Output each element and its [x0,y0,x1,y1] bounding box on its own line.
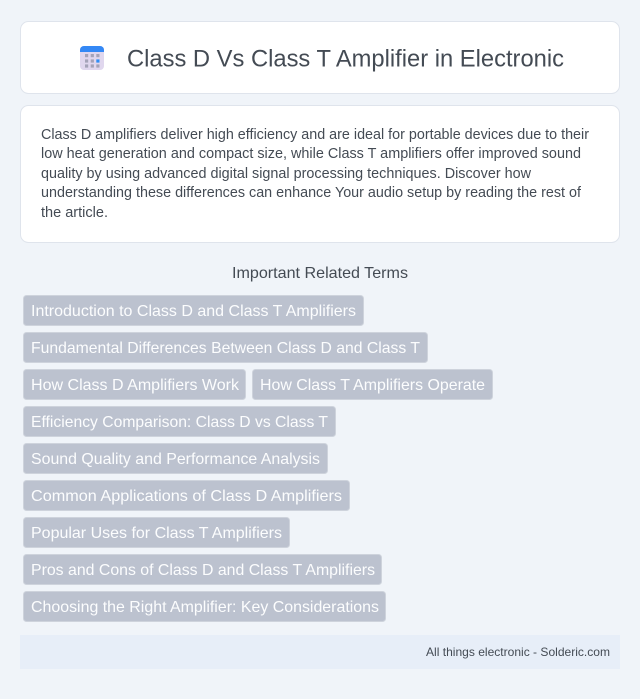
tag: how class d works: How Class D Amplifiers Work [31,377,239,394]
tag: how class t operates [252,370,492,400]
footer: All things electronic - Solderic.com [426,645,610,659]
panel: summary paragraph [20,106,620,242]
tag: class t uses: Popular Uses for Class T Amplifiers [31,525,282,542]
icon: calendar grid [80,46,104,70]
tag: fundamental differences: Fundamental Differences Between Class D and Class T [31,340,420,357]
tag: sound quality [24,444,328,474]
tag: choosing the right amplifier [24,592,386,622]
tag: pros and cons: Pros and Cons of Class D and Class T Amplifiers [31,562,375,579]
tag: fundamental differences [24,332,428,362]
tag: introduction [24,296,364,326]
tag: choosing the right amplifier: Choosing the Right Amplifier: Key Considerations [31,599,379,616]
header panel [20,22,620,94]
tag: efficiency comparison [24,406,336,436]
panel: summary paragraph: quality by using advanced digital signal processing techniques. Discover how [41,166,532,182]
panel: summary paragraph: the article. [41,205,108,221]
heading: important related terms: Important Related Terms [232,265,408,282]
panel: summary paragraph: Class D amplifiers deliver high efficiency and are ideal for portable devices due to their [41,127,589,143]
title: Class D Vs Class T Amplifier in Electronic [127,46,564,72]
tag: class d applications: Common Applications of Class D Amplifiers [31,488,342,505]
tag: class d applications [24,480,350,510]
tag: class t uses [24,518,290,548]
tag: pros and cons [24,554,382,584]
footer [20,635,620,669]
tag: how class d works [24,370,246,400]
panel: summary paragraph: understanding these differences can enhance Your audio setup by reading the rest of [41,185,581,201]
tag: efficiency comparison: Efficiency Comparison: Class D vs Class T [31,414,328,431]
tag: how class t operates: How Class T Amplifiers Operate [260,377,485,394]
tag: sound quality: Sound Quality and Performance Analysis [31,451,320,468]
tag: introduction: Introduction to Class D and Class T Amplifiers [31,303,356,320]
panel: summary paragraph: low heat generation and compact size, while Class T amplifiers offer improved sound [41,146,581,162]
